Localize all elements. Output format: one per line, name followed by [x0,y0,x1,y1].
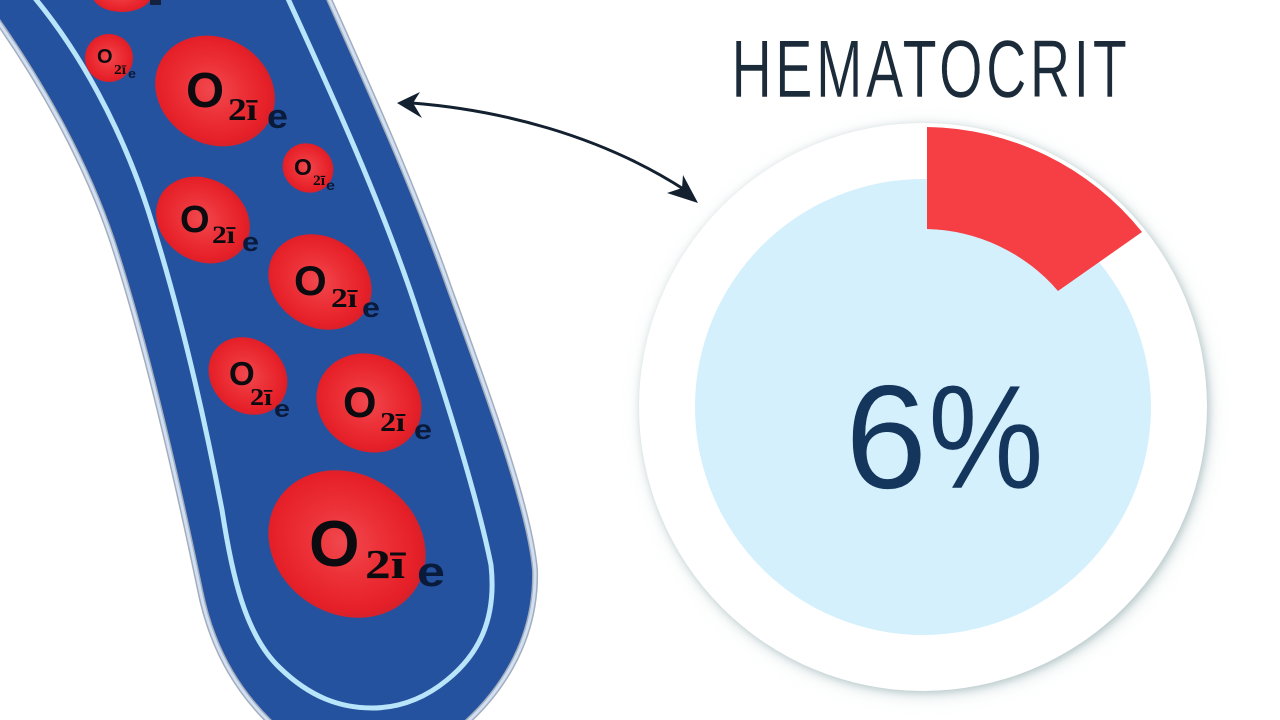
red blood cell with O2 label [273,133,343,203]
red blood cell with O2 label [250,215,390,349]
title: HEMATOCRIT [732,23,1130,115]
blood vessel [0,0,535,720]
red blood cell with O2 label: 2ī [212,222,236,249]
red blood cell with O2 label: O [186,64,224,118]
red blood cell with O2 label: O [180,199,210,241]
red blood cell with O2 label: e [414,414,432,445]
red blood cell with O2 label: O [309,507,360,580]
red blood cell with O2 label: e [417,548,445,595]
red blood cell with O2 label: e [326,177,335,193]
red blood cell with O2 label: O [294,257,327,304]
gauge red segment [927,127,1142,291]
gauge value: 6 [845,355,927,520]
red blood cell with O2 label: 2ī [313,173,326,189]
red blood cell with O2 label: e [267,98,288,136]
red blood cell with O2 label: e [128,66,136,81]
red blood cell with O2 label: O [294,154,312,180]
red blood cell with O2 label: e [242,227,259,257]
red blood cell with O2 label [135,14,295,168]
red blood cell with O2 label: e [274,396,290,423]
red blood cell with O2 label: 2ī [114,63,127,78]
red blood cell with O2 label: O [343,379,376,427]
gauge value [845,354,1044,520]
red blood cell with O2 label [193,321,303,431]
red blood cell with O2 label: 2ī [365,541,407,587]
vessel inner lumen line [28,0,492,708]
vessel wall [0,0,535,720]
gauge value: % [928,354,1044,520]
hematocrit gauge [639,123,1210,695]
double-headed arrow [397,92,698,203]
red blood cell with O2 label: 2ī [331,283,358,313]
gauge outer ring [639,123,1207,691]
red blood cell with O2 label [76,25,142,91]
red blood cell with O2 label: e [362,292,380,323]
red blood cell top partial [92,0,161,12]
red blood cell with O2 label: O [97,46,113,68]
red blood cell with O2 label [298,334,440,472]
gauge inner disc [695,179,1151,635]
gauge soft shadow [642,127,1210,695]
vessel outer highlight [0,0,535,720]
red blood cell with O2 label: 2ī [380,407,406,437]
red blood cell with O2 label: O [229,355,255,392]
red blood cell with O2 label [240,441,454,647]
red blood cell with O2 label [140,159,266,281]
red blood cell with O2 label: 2ī [228,91,258,127]
gauge tight shadow [641,125,1209,693]
red blood cell with O2 label: 2ī [250,385,274,411]
